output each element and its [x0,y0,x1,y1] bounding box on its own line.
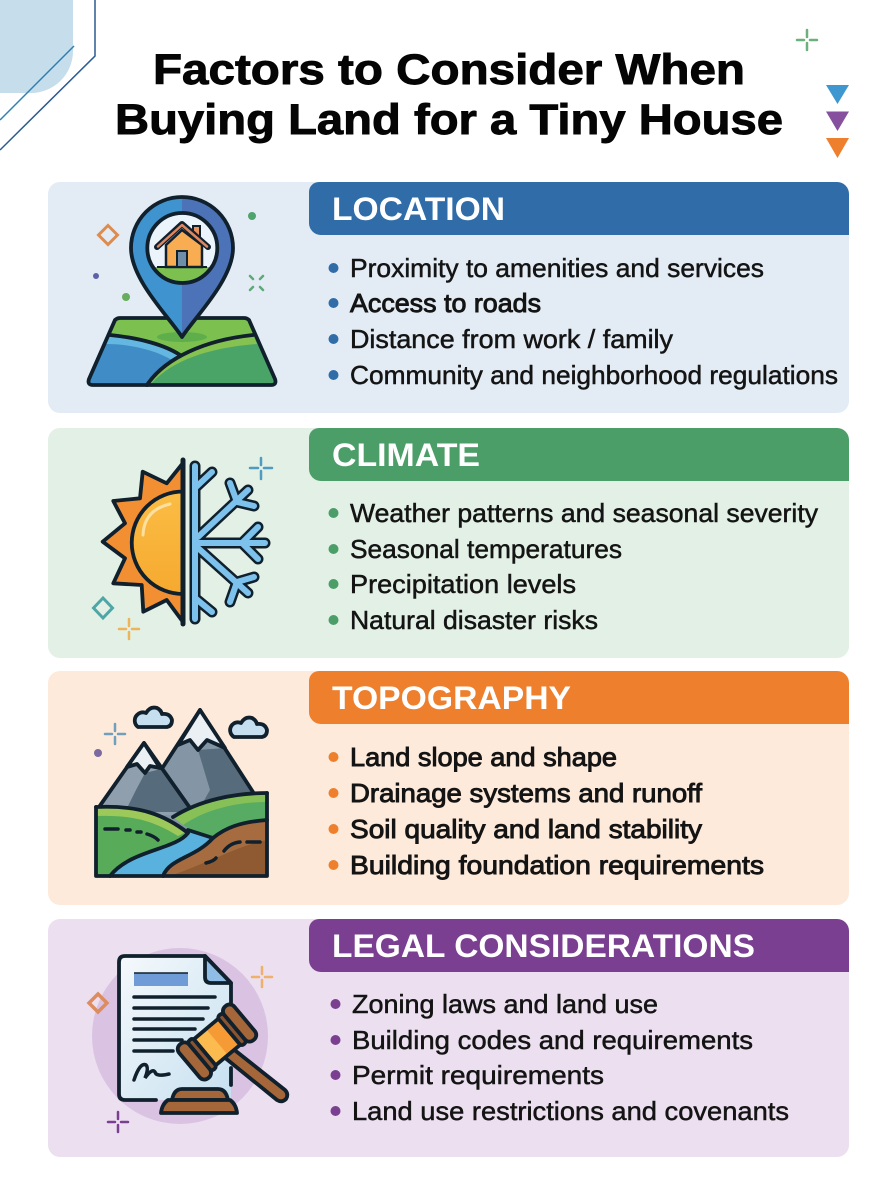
title [115,46,783,144]
decoration: stacked triangles [826,85,849,158]
title: Buying Land for a Tiny House [115,96,783,144]
panel: location [48,182,849,413]
location bullets: Community and neighborhood regulations [350,360,838,390]
topography bullets: Soil quality and land stability [350,814,702,844]
legal bullets: Zoning laws and land use [352,989,658,1019]
topography header: TOPOGRAPHY [332,680,571,716]
icon: document and gavel [89,948,287,1132]
location decorations [93,212,263,301]
topography bullets: Land slope and shape [350,742,617,772]
icon: map pin with house [88,197,276,385]
climate bullets: Precipitation levels [350,569,576,599]
decoration: top-left corner shape [0,0,95,150]
legal bullets: Permit requirements [352,1060,604,1090]
legal header [309,919,849,972]
climate bullets: Seasonal temperatures [350,534,622,564]
icon: half sun half snowflake [94,458,272,639]
legal decorations [89,967,272,1132]
climate bullets: Weather patterns and seasonal severity [350,498,818,528]
climate bullets: Natural disaster risks [350,605,598,635]
location bullets [328,253,838,390]
climate header [309,428,849,481]
panel: legal considerations [48,919,849,1157]
legal header: LEGAL CONSIDERATIONS [332,928,755,964]
legal bullets: Building codes and requirements [352,1025,753,1055]
legal bullets: Land use restrictions and covenants [352,1096,789,1126]
legal bullets [330,989,789,1126]
topography bullets [328,742,764,880]
topography bullets: Drainage systems and runoff [350,778,703,808]
location header [309,182,849,235]
decoration: green sparkle [797,30,817,50]
panel: climate [48,428,849,658]
icon: mountains and river [94,708,267,876]
location header: LOCATION [332,191,505,227]
topography bullets: Building foundation requirements [350,850,764,880]
title: Factors to Consider When [153,46,745,94]
location bullets: Distance from work / family [350,324,673,354]
climate bullets [328,498,818,635]
location bullets: Access to roads [350,288,541,318]
topography header [309,671,849,724]
climate decorations [94,458,272,639]
panel: topography [48,671,849,905]
location bullets: Proximity to amenities and services [350,253,764,283]
topography decorations [94,724,125,757]
climate header: CLIMATE [332,437,480,473]
